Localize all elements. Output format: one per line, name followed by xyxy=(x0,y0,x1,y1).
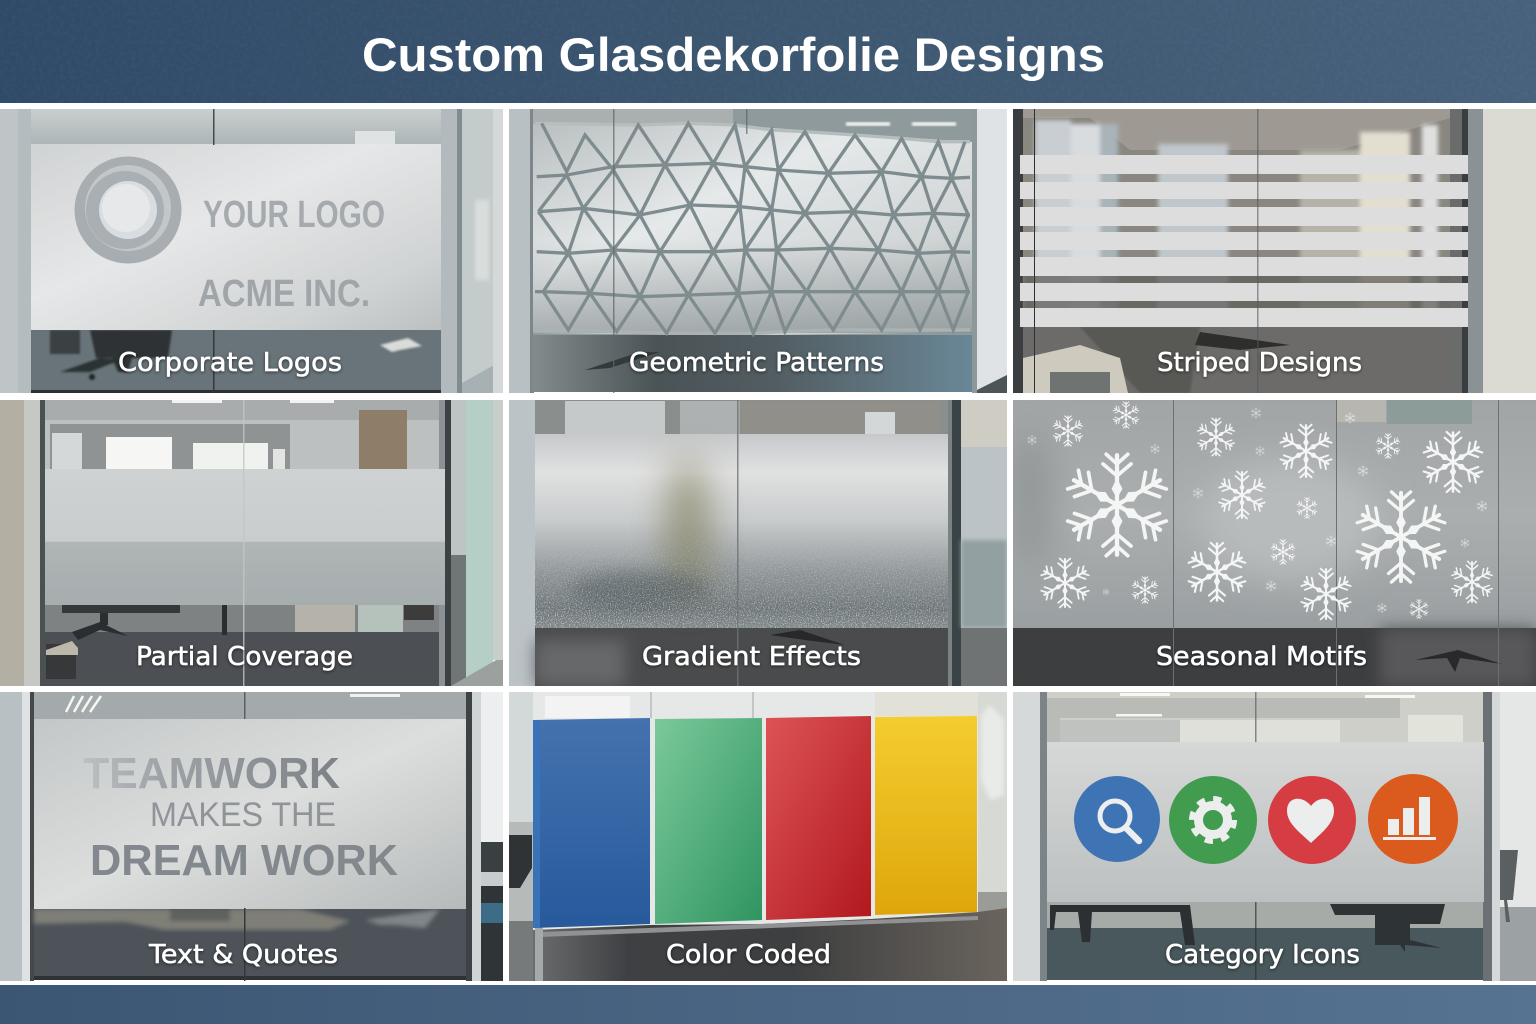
panel: geometric patterns xyxy=(509,109,1007,393)
panel: seasonal motifs xyxy=(1008,400,1536,686)
film panel xyxy=(31,109,441,330)
icon: circular logo xyxy=(74,156,182,264)
frosted band xyxy=(45,469,445,605)
panel: striped designs xyxy=(1013,109,1536,393)
triangle pattern xyxy=(535,123,970,333)
color panels xyxy=(533,716,977,928)
label: Seasonal Motifs xyxy=(1156,642,1367,672)
label: Geometric Patterns xyxy=(629,348,884,378)
footer band xyxy=(0,985,1536,1024)
label: Corporate Logos xyxy=(118,348,342,378)
label: Category Icons xyxy=(1165,940,1360,970)
title: Custom Glasdekorfolie Designs xyxy=(362,28,1105,81)
yellow panel xyxy=(875,716,977,915)
label: Color Coded xyxy=(666,940,831,970)
green panel xyxy=(655,718,762,924)
icon: bar chart xyxy=(1368,774,1458,864)
quote text xyxy=(84,758,398,876)
panel: category icons xyxy=(1013,692,1536,981)
blue panel xyxy=(533,718,650,928)
frosted film xyxy=(34,719,466,909)
icon: heart xyxy=(1268,776,1356,864)
quote text: DREAM WORK xyxy=(90,836,398,885)
panel: color coded xyxy=(509,692,1007,981)
quote text: MAKES THE xyxy=(150,796,336,834)
label: Striped Designs xyxy=(1157,348,1362,378)
company name: ACME INC. xyxy=(198,273,370,315)
gradient film xyxy=(535,434,948,628)
icon: gear xyxy=(1169,776,1257,864)
quote text: TEAMWORK xyxy=(83,749,340,798)
film with triangle pattern xyxy=(533,123,972,335)
snowflakes xyxy=(1027,402,1493,619)
speckle band xyxy=(535,534,948,628)
header banner xyxy=(0,0,1536,103)
label: Gradient Effects xyxy=(642,642,861,672)
label: Partial Coverage xyxy=(136,642,353,672)
icon: magnifier xyxy=(1074,776,1160,862)
panel: gradient effects xyxy=(509,400,1007,686)
panel: partial coverage xyxy=(0,399,503,686)
red panel xyxy=(766,716,871,920)
blurred silhouette xyxy=(666,458,710,602)
frosted film xyxy=(1047,742,1484,902)
label: Text & Quotes xyxy=(148,940,338,970)
panel: corporate logos xyxy=(0,109,503,393)
panel: text and quotes xyxy=(0,692,503,981)
frosted stripes xyxy=(1020,155,1468,327)
logo text: YOUR LOGO xyxy=(203,194,385,236)
